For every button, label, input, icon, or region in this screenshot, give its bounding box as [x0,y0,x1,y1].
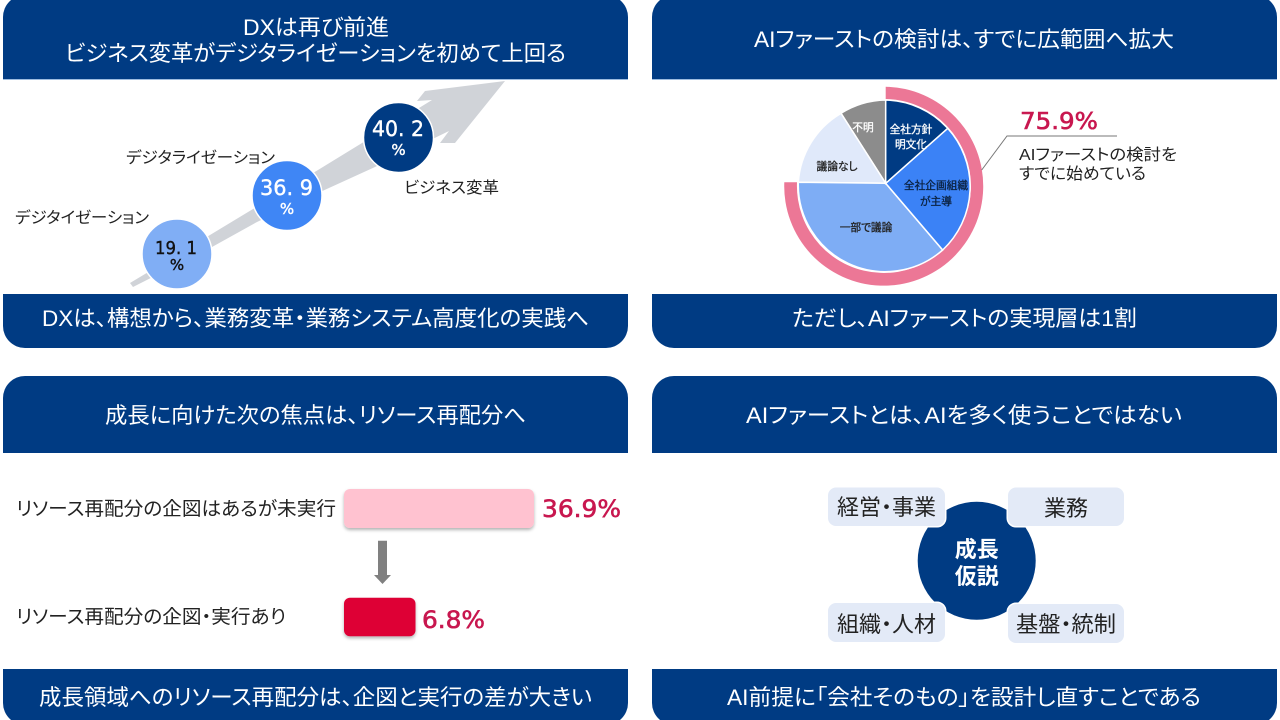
panel: AI first status [652,0,1277,348]
pie labels: 全社企画組織 [904,179,968,192]
chip: organization and talent: 組織・人材 [837,612,936,637]
label: digitization: デジタイゼーション [15,208,149,227]
slice: company policy [886,100,948,183]
chip: foundation and governance: 基盤・統制 [1016,612,1116,637]
label: business transformation: ビジネス変革 [404,179,499,197]
chip: foundation and governance [1008,604,1124,643]
pie labels: 不明 [852,122,874,134]
conclusion bar: redesign the company: AI前提に「会社そのもの」を設計し直すことである [727,685,1201,710]
callout: 75.9%: AIファーストの検討を [1019,146,1177,164]
chip: management and business [828,488,945,526]
heading: AI first is widening [652,0,1277,80]
pie labels: が主導 [920,195,952,208]
arrow: down [374,541,391,584]
bubble: 36.9%: % [280,200,294,218]
bubble: 40.2% [364,102,434,172]
arrow: rising trend [130,81,505,287]
panel: DX trend [3,0,628,348]
label: digitalization: デジタライゼーション [126,148,275,167]
row label: intent with execution: リソース再配分の企図・実行あり [16,606,286,628]
slice: partial discussion [798,182,943,272]
bubble: 19.1%: 19. 1 [155,238,197,259]
pie chart: AI first discussion [784,87,983,286]
pie labels: 全社方針 [890,123,933,136]
panel: definition of AI first [652,376,1277,720]
heading: DX resumes: DXは再び前進 [243,15,389,40]
slice: not known [841,100,886,183]
heading: DX resumes: ビジネス変革がデジタライゼーションを初めて上回る [65,41,566,66]
heading: what AI first is not: AIファーストとは、AIを多く使うことではない [746,403,1182,428]
conclusion bar: gap between intent and execution [3,669,628,720]
value: 6.8%: 6.8% [422,606,485,634]
conclusion bar: realization is 10%: ただし、AIファーストの実現層は1割 [792,306,1137,331]
chip: organization and talent [828,603,945,642]
heading: next focus: 成長に向けた次の焦点は、リソース再配分へ [105,403,526,428]
heading: AI first is widening: AIファーストの検討は、すでに広範囲へ拡大 [754,27,1174,52]
bubble: 40.2%: % [391,141,406,159]
center circle: growth hypothesis [918,502,1036,620]
callout: 75.9%: 75.9% [1020,109,1098,135]
bar: 36.9% [344,489,534,528]
value: 36.9%: 36.9% [542,495,621,523]
bubble: 19.1% [142,219,212,289]
pie labels [817,122,968,234]
conclusion bar: redesign the company [652,669,1277,720]
pie labels: 一部で議論 [840,221,893,234]
bubble: 19.1%: % [170,256,184,274]
chip: operations [1008,488,1124,526]
bubble: 36.9%: 36. 9 [260,176,313,200]
center circle: growth hypothesis: 成長 [955,537,999,562]
slice: no discussion [798,113,886,183]
slice: corporate planning leads [886,128,970,250]
highlight ring: 75.9% [784,87,983,286]
callout: 75.9%: すでに始めている [1019,165,1146,183]
pie labels: 議論なし [817,160,858,173]
chip: operations: 業務 [1044,496,1088,521]
heading: DX resumes [3,0,628,80]
panel: resource reallocation [3,376,628,720]
conclusion bar: gap between intent and execution: 成長領域へのリソース再配分は、企図と実行の差が大きい [39,685,592,710]
pie labels: 明文化 [895,138,927,151]
conclusion bar: DX practice: DXは、構想から、業務変革・業務システム高度化の実践へ [42,306,589,331]
callout: 75.9% [982,109,1177,183]
conclusion bar: DX practice [3,294,628,348]
chip: management and business: 経営・事業 [837,495,936,520]
heading: next focus [3,376,628,453]
bar: 6.8% [344,598,416,636]
bubble: 36.9% [252,160,322,230]
heading: what AI first is not [652,376,1277,453]
center circle: growth hypothesis: 仮説 [955,564,999,589]
row label: intent without execution: リソース再配分の企図はあるが未実行 [16,498,336,520]
bubble: 40.2%: 40. 2 [372,117,424,141]
conclusion bar: realization is 10% [652,294,1277,348]
